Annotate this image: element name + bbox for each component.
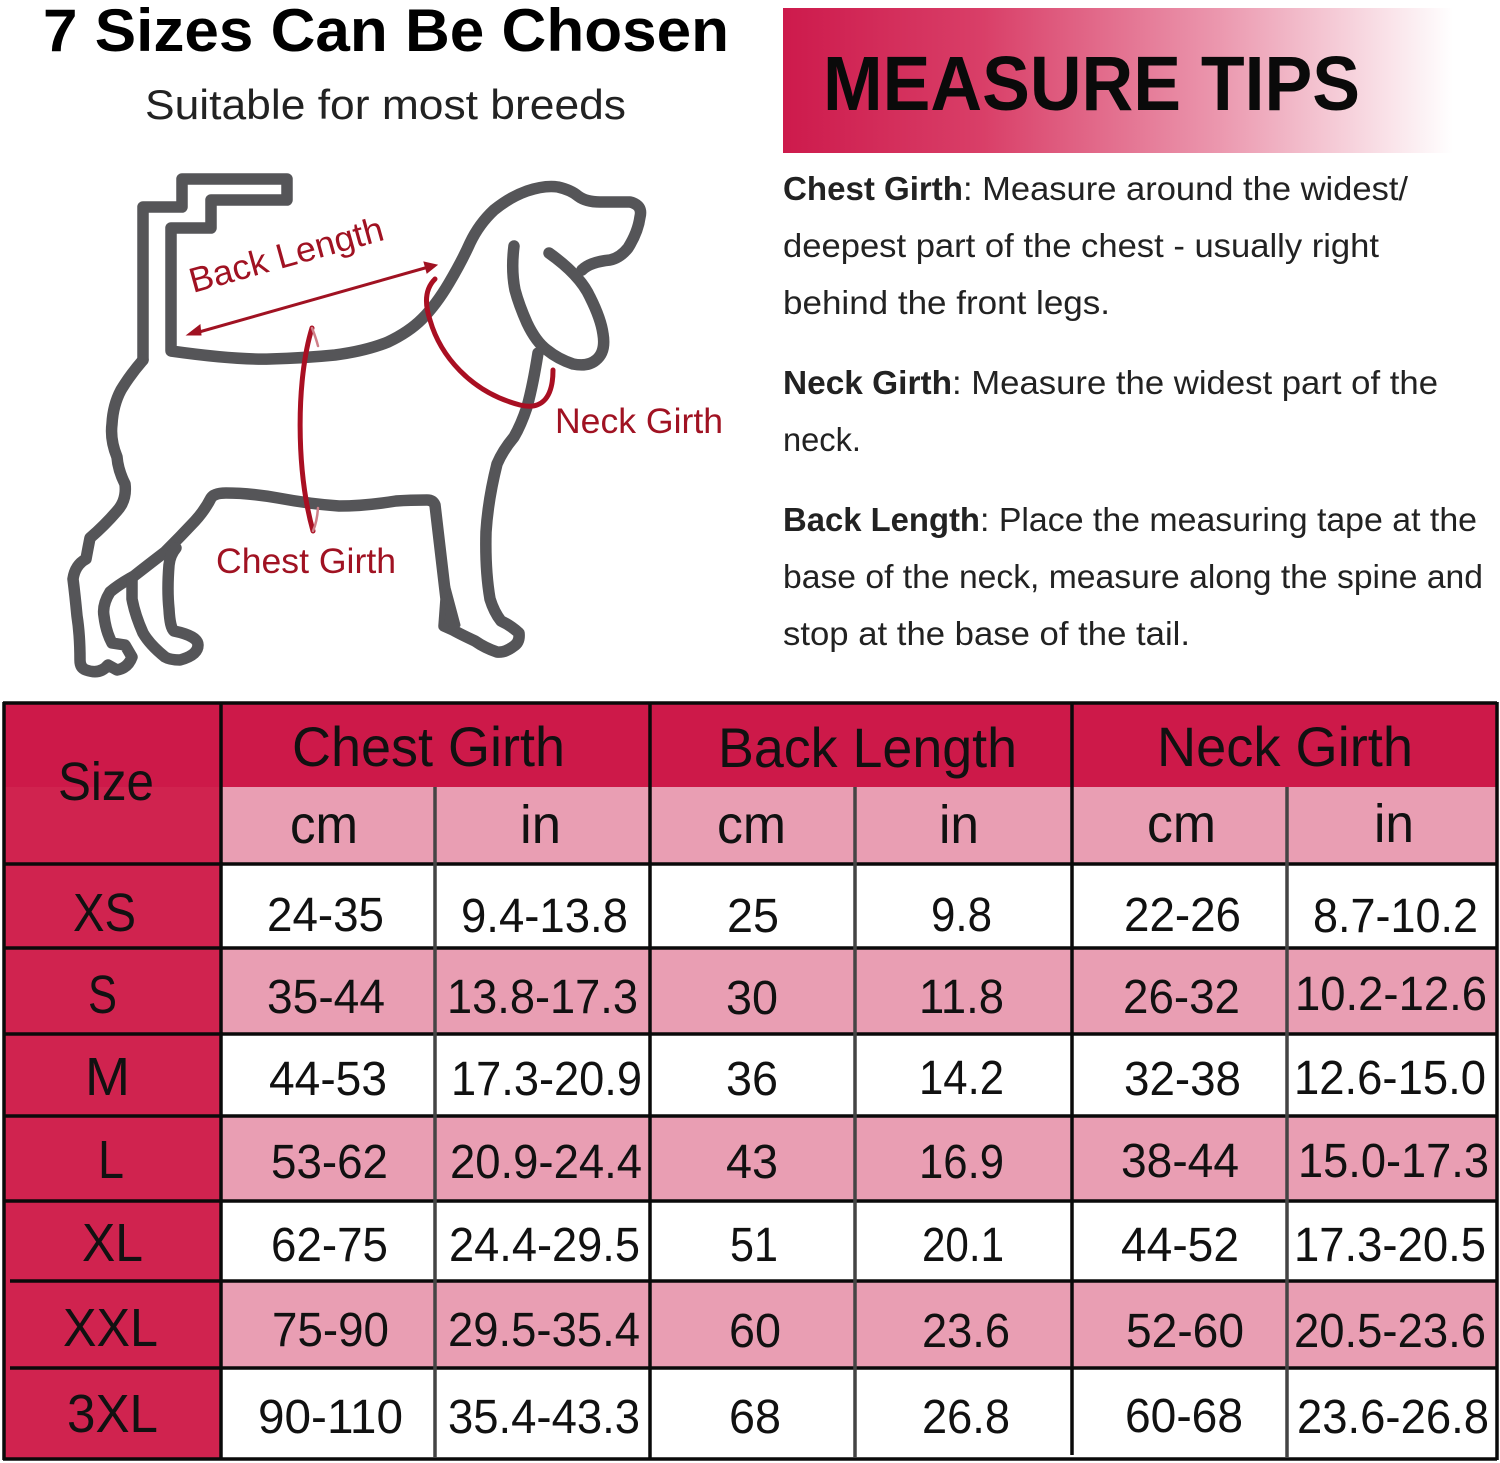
text block: chest girth tip: deepest part of the chest - usually right [783,227,1379,264]
row: S: 10.2-12.6 [1295,968,1487,1021]
row: XL: 24.4-29.5 [449,1219,640,1272]
text block: neck girth tip: Neck Girth [783,364,952,401]
row: M: M [85,1047,130,1107]
row: XS: XS [73,883,136,943]
table header row: cm [1147,794,1216,854]
table header row: in [939,795,979,855]
icon: dog outline [73,179,641,672]
text block: back length tip: : Place the measuring tape at the [980,501,1477,538]
table header row: Neck Girth [1157,715,1413,778]
text block: neck girth tip: : Measure the widest part of the [952,364,1438,401]
text block: back length tip: base of the neck, measure along the spine and [783,558,1483,595]
row: S: 11.8 [919,971,1004,1024]
row: 3XL: 60-68 [1125,1390,1243,1443]
row: 3XL: 26.8 [922,1391,1010,1444]
row: XS: 9.4-13.8 [461,890,628,943]
row: XL: 51 [730,1219,778,1272]
row: S: 30 [726,972,778,1025]
row: XL: 44-52 [1121,1219,1239,1272]
row: XL: 17.3-20.5 [1294,1219,1486,1272]
row: XS: 22-26 [1124,889,1241,942]
row: XS: 24-35 [267,889,384,942]
text block: back length tip [783,501,1483,652]
size chart table [3,702,1497,1460]
neck girth measuring ring [426,279,553,406]
row: S: 35-44 [267,971,385,1024]
row: XL: 20.1 [922,1219,1004,1272]
row: XL: XL [82,1213,143,1273]
text block: chest girth tip: Chest Girth [783,170,963,207]
row: XXL: 23.6 [922,1305,1010,1358]
row: 3XL: 23.6-26.8 [1297,1391,1489,1444]
panel: measure tips banner [783,8,1453,153]
row: XXL: XXL [63,1298,158,1358]
row: 3XL: 3XL [67,1384,158,1444]
row: 3XL [67,1384,1489,1444]
row: 3XL: 90-110 [258,1391,403,1444]
row: L: 15.0-17.3 [1298,1135,1489,1188]
table grid lines [3,702,1497,1460]
label: chest girth: Chest Girth [216,542,396,581]
row: XS: 9.8 [931,889,992,942]
row: M: 44-53 [269,1053,387,1106]
arrow: back length [187,262,437,335]
table header row: Back Length [718,716,1017,779]
table backgrounds [4,702,1497,1459]
table header row: cm [290,795,358,855]
row: L: 20.9-24.4 [450,1136,642,1189]
text block: chest girth tip [783,170,1409,321]
row: S: 13.8-17.3 [447,971,638,1024]
text block: back length tip: Back Length [783,501,980,538]
label: neck girth: Neck Girth [555,402,723,441]
row: S: 26-32 [1123,971,1240,1024]
text block: back length tip: stop at the base of the tail. [783,615,1190,652]
label: back length: Back Length [185,210,388,301]
row: 3XL: 68 [729,1391,781,1444]
table header row: in [520,795,561,855]
row: XXL: 75-90 [272,1304,389,1357]
row: M: 17.3-20.9 [451,1053,642,1106]
row: XXL [63,1298,1486,1358]
table header row: Chest Girth [292,715,565,778]
table header row: cm [717,795,786,855]
row: XXL: 29.5-35.4 [448,1304,640,1357]
row: M: 12.6-15.0 [1294,1052,1486,1105]
chest girth measuring ring [300,328,318,531]
row: L: 43 [726,1136,778,1189]
row: XXL: 60 [729,1305,781,1358]
text block: chest girth tip: behind the front legs. [783,284,1110,321]
row: L: L [98,1130,124,1190]
row: M [85,1047,1486,1107]
row: L: 53-62 [271,1136,388,1189]
row: M: 36 [726,1053,778,1106]
text block: neck girth tip: neck. [783,421,861,458]
banner heading: MEASURE TIPS [823,41,1360,127]
row: 3XL: 35.4-43.3 [448,1391,640,1444]
text block: chest girth tip: : Measure around the widest/ [963,170,1409,207]
row: S: S [88,965,117,1025]
subtitle: Suitable for most breeds [145,81,626,128]
row: XS [73,883,1478,943]
dog measurement diagram [73,179,723,672]
row: M: 32-38 [1124,1053,1241,1106]
row: L: 16.9 [919,1136,1004,1189]
row: M: 14.2 [919,1052,1004,1105]
row: L [98,1130,1489,1190]
text block: neck girth tip [783,364,1438,458]
table header row: in [1374,794,1414,854]
row: L: 38-44 [1121,1135,1239,1188]
row: S [88,965,1487,1025]
row: XXL: 52-60 [1126,1305,1244,1358]
row: XL: 62-75 [271,1219,388,1272]
row: XXL: 20.5-23.6 [1294,1305,1486,1358]
row: XS: 25 [727,890,779,943]
table header row: Size [58,752,154,812]
table header row [58,715,1414,855]
row: XS: 8.7-10.2 [1313,890,1478,943]
row: XL [82,1213,1486,1273]
